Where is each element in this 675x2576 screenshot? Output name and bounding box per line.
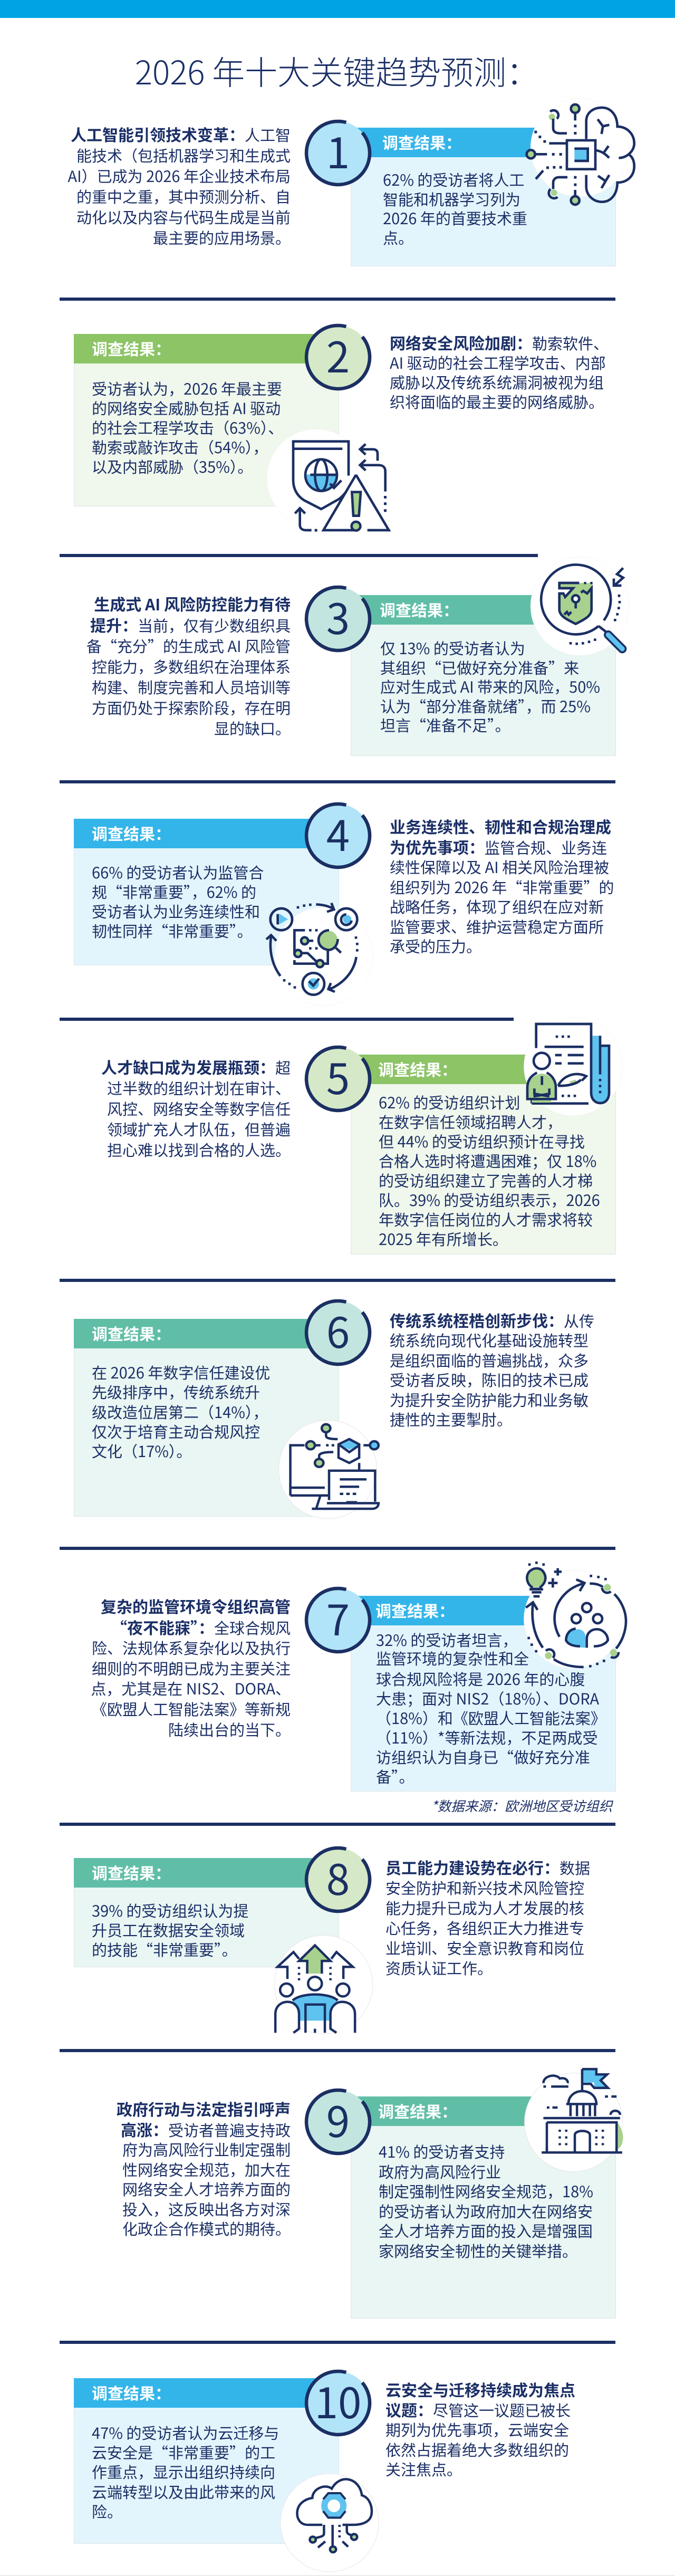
footnote: *数据来源：欧洲地区受访组织 (431, 1796, 612, 1815)
trend 4 description: 监管要求、维护运营稳定方面所 (390, 915, 604, 937)
number badge 7: 7 (326, 1587, 350, 1648)
trend 8 description: 安全防护和新兴技术风险管控 (385, 1876, 584, 1899)
number badge 8 (305, 1846, 371, 1913)
card header: 调查结果： (382, 130, 461, 154)
card header: 调查结果： (92, 2381, 171, 2404)
survey card 8 (74, 1858, 339, 1967)
card body text: 仅 13% 的受访者认为 (380, 637, 525, 659)
trend 3 description: 备“充分”的生成式 AI 风险管 (86, 635, 291, 657)
icon: regulation people cycle (524, 1562, 628, 1669)
trend 6 description (390, 1308, 594, 1430)
top banner (0, 0, 675, 18)
survey card 6 (74, 1319, 339, 1517)
trend 7 description: 点，尤其是在 NIS2、DORA、 (91, 1677, 291, 1699)
card body text: 升员工在数据安全领域 (92, 1919, 245, 1941)
trend 7 description: 陆续出台的当下。 (168, 1718, 291, 1740)
card body text: 云安全是“非常重要”的工 (92, 2441, 275, 2463)
number badge 3 (305, 586, 371, 652)
card body text: 家网络安全韧性的关键举措。 (379, 2239, 577, 2261)
card body text: 受访者认为，2026 年最主要 (92, 377, 282, 399)
panel: trend 4 (74, 802, 614, 1005)
card body text: 队。39% 的受访组织表示，2026 (379, 1189, 600, 1211)
trend 4 description: 组织列为 2026 年“非常重要”的 (390, 876, 614, 898)
card body text: 认为“部分准备就绪”，而 25% (380, 695, 591, 717)
number badge 9: 9 (326, 2089, 350, 2150)
trend 10 description: 期列为优先事项，云端安全 (385, 2418, 569, 2440)
icon: government building (521, 2066, 626, 2172)
card body text: 先级排序中，传统系统升 (92, 1381, 260, 1403)
card body text: 韧性同样“非常重要”。 (92, 920, 253, 942)
trend 5 description: 过半数的组织计划在审计、 (107, 1077, 291, 1099)
card body text: 大患；面对 NIS2（18%）、DORA (376, 1687, 599, 1709)
trend 7 description: 《欧盟人工智能法案》等新规 (92, 1698, 291, 1720)
card body text: 仅次于培育主动合规风控 (92, 1420, 260, 1442)
trend 8 description: 业培训、安全意识教育和岗位 (385, 1937, 584, 1959)
card body text: 备”。 (376, 1765, 414, 1787)
trend 10 description (385, 2380, 575, 2479)
panel: trend 10 (0, 2363, 675, 2574)
icon: shield globe warning (267, 429, 391, 532)
divider 9 (60, 2341, 615, 2344)
card header (351, 595, 616, 625)
icon: magnifier over cracked shield (531, 557, 629, 655)
trend 8 description: 能力提升已成为人才发展的核 (385, 1897, 584, 1919)
card body text: 规“非常重要”，62% 的 (92, 880, 256, 903)
trend 8 description: 资质认证工作。 (385, 1957, 493, 1979)
trend 2 description: AI 驱动的社会工程学攻击、内部 (390, 351, 606, 374)
card body text (376, 1628, 606, 1787)
trend 4 description: 承受的压力。 (390, 935, 481, 957)
icon: cloud gear (277, 2472, 381, 2573)
card header: 调查结果： (92, 337, 171, 360)
survey card 7 (351, 1596, 616, 1792)
icon: AI brain chip (525, 98, 635, 206)
card body text: 的网络安全威胁包括 AI 驱动 (92, 397, 281, 419)
trend 2 description (390, 331, 609, 413)
trend 6 description: 统系统向现代化基础设施转型 (390, 1329, 589, 1351)
survey card 3 (351, 595, 616, 756)
card header (74, 334, 339, 363)
trend 7 description: 细则的不明朗已成为主要关注 (92, 1657, 291, 1679)
trend 3 description: 生成式 AI 风险防控能力有待 (94, 592, 291, 615)
trend 4 description: 战略任务，体现了组织在应对新 (390, 895, 604, 917)
card body text: 的受访者认为政府加大在网络安 (379, 2200, 593, 2222)
survey card 2 (74, 334, 339, 506)
card body text: 其组织“已做好充分准备”来 (380, 656, 579, 678)
trend 9 description: 高涨：受访者普遍支持政 (121, 2118, 291, 2141)
card body text: 41% 的受访者支持 (379, 2140, 505, 2162)
card body text: 在数字信任领域招聘人才， (379, 1110, 562, 1133)
number badge 10 (303, 2368, 373, 2438)
card body text (379, 1091, 600, 1250)
card header (351, 1055, 616, 1084)
card body text (92, 1899, 248, 1960)
trend 2 description: 网络安全风险加剧：勒索软件、 (390, 331, 609, 354)
trend 7 description (91, 1594, 291, 1740)
divider 1 (60, 298, 615, 301)
trend 6 description: 传统系统桎梏创新步伐：从传 (390, 1308, 594, 1332)
trend 5 description (101, 1055, 291, 1161)
card header: 调查结果： (375, 1598, 455, 1622)
survey card 1 (351, 128, 616, 266)
card body text: 合格人选时将遭遇困难；仅 18% (379, 1150, 596, 1172)
trend 6 description: 为提升安全防护能力和业务敏 (390, 1388, 589, 1411)
card body text: 智能和机器学习列为 (383, 188, 520, 210)
number badge 9 (303, 2087, 373, 2157)
card body text: 文化（17%）。 (92, 1440, 191, 1462)
card header (351, 1596, 616, 1625)
card header (351, 128, 616, 157)
card header (74, 1319, 339, 1348)
trend 9 description: 政府行动与法定指引呼声 (117, 2097, 291, 2120)
bottom edge (0, 2575, 675, 2576)
number badge 1 (305, 119, 371, 187)
card header: 调查结果： (378, 1057, 457, 1080)
card body text: （18%）和《欧盟人工智能法案》 (376, 1706, 606, 1728)
trend 9 description: 化政企合作模式的期待。 (122, 2217, 291, 2239)
card body text: 的技能“非常重要”。 (92, 1938, 237, 1960)
trend 1 description: 能技术（包括机器学习和生成式 (76, 144, 291, 166)
survey card 9 (351, 2096, 616, 2319)
card body text: 应对生成式 AI 带来的风险，50% (380, 675, 600, 697)
card body text: 云端转型以及由此带来的风 (92, 2481, 275, 2503)
trend 1 description: AI）已成为 2026 年企业技术布局 (68, 165, 291, 187)
card body text: 62% 的受访者将人工 (383, 168, 524, 190)
card body text: 在 2026 年数字信任建设优 (92, 1361, 270, 1383)
divider 6 (60, 1547, 615, 1550)
card header (351, 2096, 616, 2126)
trend 3 description: 控能力，多数组织在治理体系 (92, 655, 291, 677)
card body text: 39% 的受访组织认为提 (92, 1899, 248, 1921)
card body text: 监管环境的复杂性和全 (376, 1647, 529, 1669)
card body text: 球合规风险将是 2026 年的心腹 (376, 1667, 585, 1689)
trend 6 description: 捷性的主要掣肘。 (390, 1408, 512, 1430)
card body text: 年数字信任岗位的人才需求将较 (379, 1208, 593, 1230)
card body text (383, 168, 527, 248)
card body text: 政府为高风险行业 (379, 2160, 501, 2182)
trend 9 description: 投入，这反映出各方对深 (122, 2198, 291, 2220)
trend 9 description: 网络安全人才培养方面的 (122, 2178, 291, 2200)
icon: legacy systems computer (278, 1420, 380, 1519)
trend 10 description: 依然占据着绝大多数组织的 (385, 2438, 569, 2460)
divider 2 (60, 554, 538, 557)
divider 8 (60, 2049, 615, 2052)
trend 4 description: 续性保障以及 AI 相关风险治理被 (390, 856, 609, 878)
trend 1 description (68, 122, 291, 248)
trend 9 description (53, 2099, 291, 2239)
card body text: 的受访组织建立了完善的人才梯 (379, 1169, 593, 1191)
card body text: 2025 年有所增长。 (379, 1228, 508, 1250)
card body text: 47% 的受访者认为云迁移与 (92, 2421, 279, 2444)
trend 3 description: 构建、制度完善和人员培训等 (92, 676, 291, 698)
panel: trend 3 (86, 557, 629, 756)
number badge 4 (305, 802, 371, 869)
card header (74, 819, 339, 848)
trend 1 description: 最主要的应用场景。 (153, 226, 291, 248)
trend 7 description: “夜不能寐”：全球合规风 (111, 1615, 291, 1639)
card body text: （11%）*等新法规，不足两成受 (376, 1726, 597, 1748)
survey card 4 (74, 819, 339, 965)
trend 3 description (86, 592, 291, 739)
trend 4 description (390, 815, 614, 957)
card body text: 坦言“准备不足”。 (380, 714, 510, 736)
trend 1 description: 的重中之重，其中预测分析、自 (76, 185, 291, 207)
trend 3 description: 方面仍处于探索阶段，存在明 (92, 696, 291, 719)
panel: trend 6 (74, 1299, 594, 1519)
card body text (92, 2423, 279, 2521)
trend 9 description: 性网络安全规范，加大在 (122, 2158, 291, 2180)
trend 7 description: 复杂的监管环境令组织高管 (101, 1594, 291, 1617)
number badge 2: 2 (326, 324, 350, 385)
number badge 3: 3 (326, 586, 350, 647)
card body text: 作重点，显示出组织持续向 (92, 2460, 275, 2483)
trend 7 description: 险、法规体系复杂化以及执行 (92, 1636, 291, 1659)
card body text: 2026 年的首要技术重 (383, 207, 527, 229)
trend 10 description: 关注焦点。 (385, 2458, 462, 2480)
trend 5 description: 担心难以找到合格的人选。 (107, 1138, 291, 1161)
card body text: 66% 的受访者认为监管合 (92, 861, 264, 883)
card body text (92, 1361, 270, 1462)
trend 1 description: 动化以及内容与代码生成是当前 (76, 206, 291, 228)
card body text: 访组织认为自身已“做好充分准 (376, 1745, 590, 1767)
trend 10 description: 云安全与迁移持续成为焦点 (385, 2378, 575, 2401)
card body text: 级改造位居第二（14%）， (92, 1401, 268, 1423)
number badge 2 (305, 324, 371, 390)
divider 3 (60, 780, 615, 783)
trend 6 description: 受访者反映，陈旧的技术已成 (390, 1368, 589, 1391)
card body text (380, 637, 600, 736)
card body text: 以及内部威胁（35%）。 (92, 455, 253, 477)
number badge 5: 5 (326, 1046, 350, 1107)
card header (74, 2378, 339, 2408)
card body text: 制定强制性网络安全规范，18% (379, 2180, 593, 2202)
divider 5 (60, 1279, 615, 1282)
card header: 调查结果： (378, 2099, 457, 2122)
trend 8 description: 员工能力建设势在必行：数据 (385, 1855, 590, 1879)
card header: 调查结果： (92, 1321, 171, 1345)
card body text (92, 377, 283, 477)
divider 4 (60, 1018, 514, 1021)
trend 8 description: 心任务，各组织正大力推进专 (385, 1917, 584, 1939)
panel: trend 8 (74, 1846, 590, 2034)
trend 5 description: 领域扩充人才队伍，但普遍 (107, 1118, 291, 1140)
trend 8 description (385, 1855, 590, 1979)
panel: trend 2 (74, 324, 609, 532)
panel: trend 5 (101, 1017, 622, 1255)
trend 3 description: 显的缺口。 (214, 717, 291, 739)
card body text: 62% 的受访组织计划 (379, 1091, 520, 1113)
survey card 5 (351, 1055, 616, 1255)
card body text: 但 44% 的受访组织预计在寻找 (379, 1130, 585, 1152)
card header: 调查结果： (92, 1861, 171, 1884)
card body text: 的社会工程学攻击（63%）、 (92, 416, 283, 438)
title: 2026 年十大关键趋势预测： (135, 46, 539, 94)
trend 10 description: 议题：尽管这一议题已被长 (385, 2398, 571, 2421)
number badge 5 (305, 1046, 371, 1112)
card body text: 受访者认为业务连续性和 (92, 900, 260, 922)
icon: workforce growth arrows (274, 1935, 373, 2034)
trend 2 description: 威胁以及传统系统漏洞被视为组 (390, 371, 604, 393)
survey card 10 (74, 2378, 339, 2544)
divider 7 (60, 1823, 615, 1826)
card body text (379, 2142, 593, 2261)
number badge 7 (305, 1587, 371, 1653)
trend 6 description: 是组织面临的普遍挑战，众多 (390, 1349, 589, 1371)
card body text: 点。 (383, 226, 413, 248)
trend 4 description: 为优先事项：监管合规、业务连 (390, 835, 607, 858)
panel: trend 1 (68, 98, 635, 266)
number badge 1: 1 (326, 120, 350, 181)
icon: talent document (524, 1017, 622, 1116)
icon: continuity cycle (266, 902, 373, 1005)
number badge 6: 6 (326, 1299, 350, 1361)
panel: trend 7 (91, 1562, 628, 1815)
trend 4 description: 业务连续性、韧性和合规治理成 (390, 815, 611, 838)
card header (74, 1858, 339, 1888)
trend 3 description: 提升：当前，仅有少数组织具 (90, 613, 291, 636)
card header: 调查结果： (92, 821, 171, 845)
card body text: 32% 的受访者坦言， (376, 1628, 517, 1650)
number badge 4: 4 (326, 802, 350, 864)
trend 1 description: 人工智能引领技术变革：人工智 (71, 122, 291, 146)
number badge 8: 8 (326, 1846, 350, 1908)
number badge 10: 10 (315, 2370, 361, 2431)
trend 9 description: 府为高风险行业制定强制 (122, 2138, 291, 2160)
trend 5 description: 人才缺口成为发展瓶颈：超 (101, 1055, 291, 1078)
number badge 6 (305, 1299, 371, 1366)
trend 5 description: 风控、网络安全等数字信任 (107, 1097, 291, 1119)
trend 2 description: 织将面临的最主要的网络威胁。 (390, 390, 604, 413)
card body text: 险。 (92, 2500, 122, 2522)
card body text: 全人才培养方面的投入是增强国 (379, 2219, 593, 2242)
card body text (92, 861, 264, 942)
card header: 调查结果： (380, 598, 459, 621)
panel: trend 9 (0, 2068, 675, 2321)
card body text: 勒索或敲诈攻击（54%）， (92, 436, 268, 458)
